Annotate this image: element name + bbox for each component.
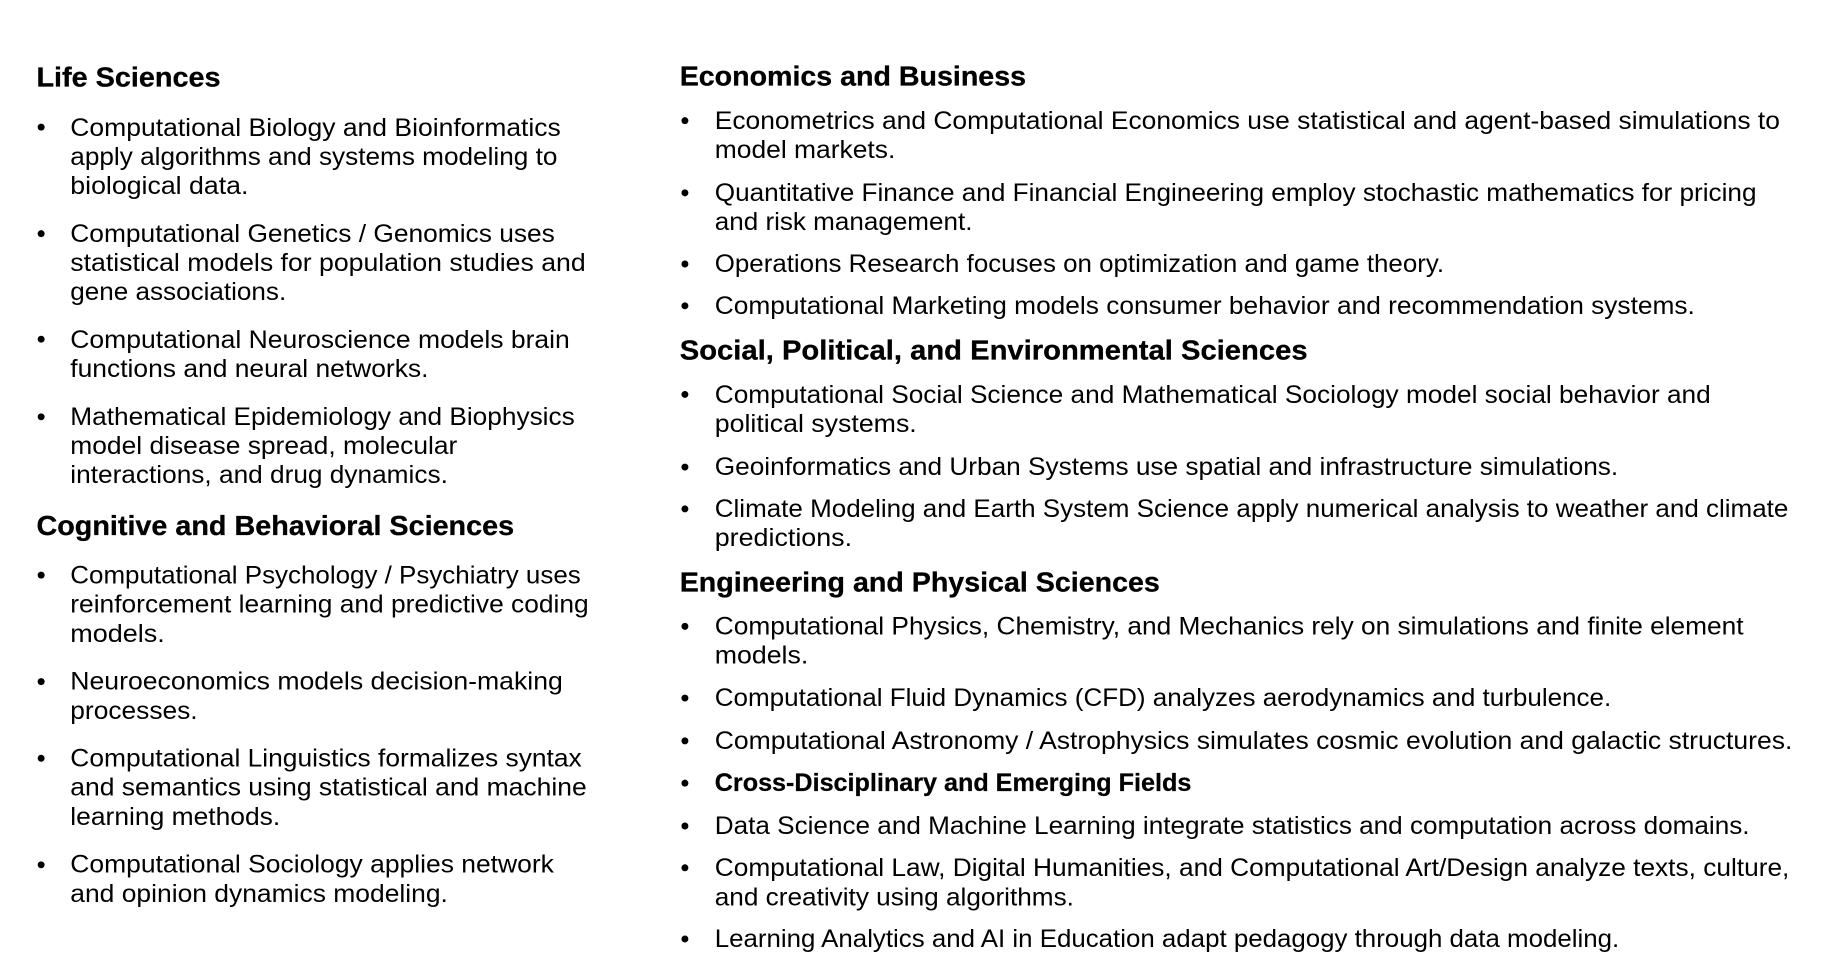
list item: linguistics (38, 745, 587, 831)
list item: epidemiology (38, 403, 575, 489)
left column (36, 61, 589, 908)
list item: fluid dynamics: Computational Fluid Dynamics (CFD) analyzes aerodynamics and turbulence. (715, 684, 1611, 712)
right column (680, 61, 1792, 953)
list item: neuroeconomics (38, 668, 563, 725)
list item: epidemiology: Mathematical Epidemiology and Biophysics (70, 403, 575, 431)
list item: climate modeling: Climate Modeling and Earth System Science apply numerical analysis to weather and climate (715, 495, 1788, 523)
list item: cross-disciplinary heading: Cross-Disciplinary and Emerging Fields (715, 769, 1191, 797)
list item: operations research: Operations Research focuses on optimization and game theory. (715, 250, 1444, 278)
list item: neuroeconomics: Neuroeconomics models decision-making (70, 668, 563, 696)
list item: neuroscience: functions and neural networks. (70, 355, 428, 383)
list item: social science: political systems. (715, 410, 917, 438)
list item: geoinformatics: Geoinformatics and Urban Systems use spatial and infrastructure simulations. (715, 453, 1618, 481)
list item: sociology: Computational Sociology applies network (70, 851, 554, 879)
list item: biology: biological data. (70, 172, 248, 200)
list item: law and humanities (681, 854, 1789, 911)
list item: econometrics: model markets. (715, 136, 895, 164)
list item: econometrics (681, 107, 1780, 164)
list item: biology: Computational Biology and Bioinformatics (70, 114, 561, 142)
heading: Life Sciences: Life Sciences (36, 61, 221, 92)
list item: social science: Computational Social Science and Mathematical Sociology model social behavior and (715, 381, 1711, 409)
list item: quantitative finance: Quantitative Finance and Financial Engineering employ stochastic mathematics for pricing (715, 179, 1757, 207)
list item: genetics: statistical models for population studies and (70, 249, 586, 277)
list item: linguistics: Computational Linguistics formalizes syntax (70, 745, 582, 773)
list item: climate modeling: predictions. (715, 524, 852, 552)
list item: neuroscience (38, 326, 570, 383)
list item: psychology: models. (70, 620, 165, 648)
list item: linguistics: learning methods. (70, 803, 280, 831)
list item: social science (681, 381, 1711, 438)
list item: epidemiology: model disease spread, molecular (70, 432, 457, 460)
list item: law and humanities: Computational Law, Digital Humanities, and Computational Art/Design analyze texts, culture, (715, 854, 1789, 882)
list item: law and humanities: and creativity using algorithms. (715, 883, 1074, 911)
list item: physics: models. (715, 642, 808, 670)
list item: astronomy: Computational Astronomy / Astrophysics simulates cosmic evolution and galactic structures. (715, 727, 1792, 755)
list item: sociology: and opinion dynamics modeling. (70, 880, 448, 908)
list item: linguistics: and semantics using statistical and machine (70, 774, 587, 802)
list item: marketing: Computational Marketing models consumer behavior and recommendation systems. (715, 292, 1695, 320)
heading: Social, Political, and Environmental Sciences: Social, Political, and Environmental Sciences (680, 335, 1308, 366)
heading: Engineering and Physical Sciences: Engineering and Physical Sciences (680, 567, 1160, 598)
list item: neuroscience: Computational Neuroscience models brain (70, 326, 570, 354)
list item: epidemiology: interactions, and drug dynamics. (70, 461, 448, 489)
list item: biology (38, 114, 561, 200)
list item: genetics: gene associations. (70, 278, 286, 306)
list item: biology: apply algorithms and systems modeling to (70, 143, 557, 171)
heading: Cognitive and Behavioral Sciences: Cognitive and Behavioral Sciences (36, 510, 514, 541)
list item: quantitative finance: and risk management. (715, 208, 972, 236)
list item: quantitative finance (681, 179, 1757, 236)
list item: neuroeconomics: processes. (70, 697, 198, 725)
list item: physics: Computational Physics, Chemistry, and Mechanics rely on simulations and finite element (715, 613, 1744, 641)
list item: data science: Data Science and Machine Learning integrate statistics and computation across domains. (715, 812, 1750, 840)
list item: physics (681, 613, 1744, 670)
heading: Economics and Business: Economics and Business (680, 61, 1026, 92)
list item: genetics (38, 220, 586, 306)
list item: psychology: Computational Psychology / Psychiatry uses (70, 562, 581, 590)
list item: psychology (38, 562, 589, 648)
list item: sociology (38, 851, 554, 908)
list item: learning analytics: Learning Analytics and AI in Education adapt pedagogy through data modeling. (715, 925, 1619, 953)
list item: econometrics: Econometrics and Computational Economics use statistical and agent-based simulations to (715, 107, 1780, 135)
list item: genetics: Computational Genetics / Genomics uses (70, 220, 555, 248)
list item: psychology: reinforcement learning and predictive coding (70, 591, 589, 619)
list item: climate modeling (681, 495, 1788, 552)
